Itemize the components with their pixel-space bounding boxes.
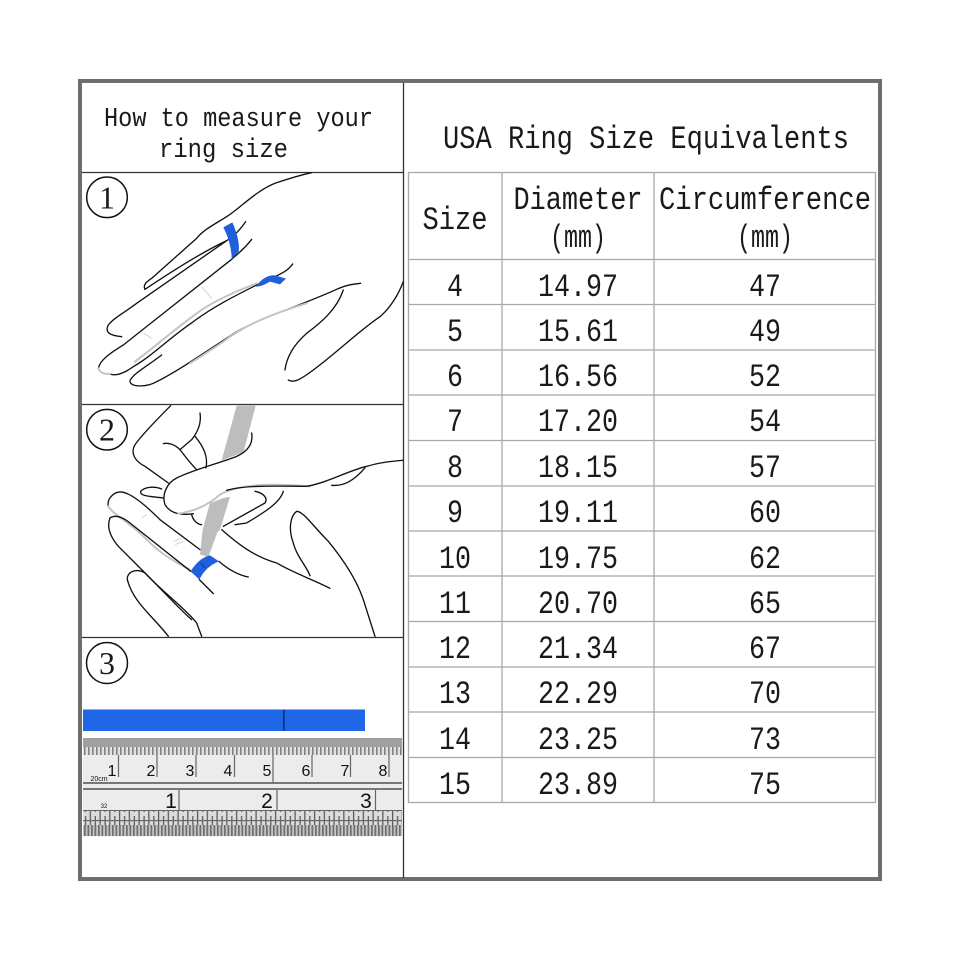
table rows: 6 <box>447 359 463 396</box>
table grid <box>408 172 876 802</box>
icon: blue tape end <box>256 275 286 287</box>
icon: number 3 <box>86 642 128 684</box>
panel: how to measure heading: ring size <box>159 136 288 166</box>
table rows: 21.34 <box>538 631 618 668</box>
icon: blue tape around finger <box>191 555 219 580</box>
table rows: 15.61 <box>538 314 618 351</box>
ruler: 8 <box>379 763 388 780</box>
table rows: 75 <box>749 767 781 804</box>
table rows <box>439 269 781 804</box>
table rows: 62 <box>749 541 781 578</box>
ruler: 2 <box>261 790 273 813</box>
table rows: 4 <box>447 269 463 306</box>
table rows: 52 <box>749 359 781 396</box>
hand outline <box>98 173 403 386</box>
table rows: 65 <box>749 586 781 623</box>
table rows: 47 <box>749 269 781 306</box>
table rows: 12 <box>439 631 471 668</box>
table header: Diameter <box>514 182 642 219</box>
ruler: 4 <box>224 763 233 780</box>
table header: (mm) <box>550 220 606 257</box>
outer frame <box>80 81 880 879</box>
icon: pen <box>200 406 256 557</box>
ruler <box>83 738 402 836</box>
ruler: 1 <box>108 763 117 780</box>
icon: number 1 <box>87 177 127 218</box>
table rows: 60 <box>749 495 781 532</box>
icon: blue tape on finger <box>223 222 239 259</box>
ruler: 20cm <box>90 776 108 783</box>
table rows: 16.56 <box>538 359 618 396</box>
ruler: 32 <box>101 804 108 810</box>
table rows: 20.70 <box>538 586 618 623</box>
table rows: 70 <box>749 676 781 713</box>
table rows: 14.97 <box>538 269 618 306</box>
ruler: 2 <box>147 763 156 780</box>
table rows: 67 <box>749 631 781 668</box>
table rows: 10 <box>439 541 471 578</box>
table rows: 54 <box>749 404 781 441</box>
panel: how to measure heading: How to measure your <box>104 105 373 135</box>
icon: number 3: 3 <box>99 645 115 681</box>
table rows: 18.15 <box>538 450 618 487</box>
table rows: 8 <box>447 450 463 487</box>
ruler: 3 <box>186 763 195 780</box>
blue paper strip <box>83 710 365 731</box>
table rows: 19.75 <box>538 541 618 578</box>
table rows: 14 <box>439 722 471 759</box>
table rows: 7 <box>447 404 463 441</box>
table rows: 5 <box>447 314 463 351</box>
ruler: 3 <box>360 790 372 813</box>
icon: number 1: 1 <box>99 180 115 216</box>
table rows: 17.20 <box>538 404 618 441</box>
table rows: 11 <box>439 586 471 623</box>
table rows: 9 <box>447 495 463 532</box>
table rows: 15 <box>439 767 471 804</box>
panel: how to measure heading <box>82 83 403 172</box>
table rows: 19.11 <box>538 495 618 532</box>
ruler: 7 <box>341 763 350 780</box>
ruler: 1 <box>165 790 177 813</box>
table header: Size <box>422 202 488 239</box>
table rows: 57 <box>749 450 781 487</box>
hand outlines <box>108 406 403 636</box>
table rows: 23.25 <box>538 722 618 759</box>
panel dividers <box>82 83 404 878</box>
panel: step 1 hand with tape <box>87 173 403 386</box>
table header: (mm) <box>737 220 793 257</box>
table rows: 23.89 <box>538 767 618 804</box>
table header <box>422 182 871 257</box>
table: ring sizes <box>408 172 876 804</box>
ruler: 5 <box>263 763 272 780</box>
table rows: 73 <box>749 722 781 759</box>
table rows: 13 <box>439 676 471 713</box>
table header: Circumference <box>659 182 871 219</box>
table rows: 22.29 <box>538 676 618 713</box>
panel: step 2 marking the tape <box>87 406 403 636</box>
panel: step 3 tape on ruler <box>83 642 402 836</box>
ruler: 6 <box>302 763 311 780</box>
icon: number 2 <box>87 409 127 450</box>
table rows: 49 <box>749 314 781 351</box>
icon: number 2: 2 <box>99 412 115 448</box>
title: USA Ring Size Equivalents <box>443 121 849 158</box>
